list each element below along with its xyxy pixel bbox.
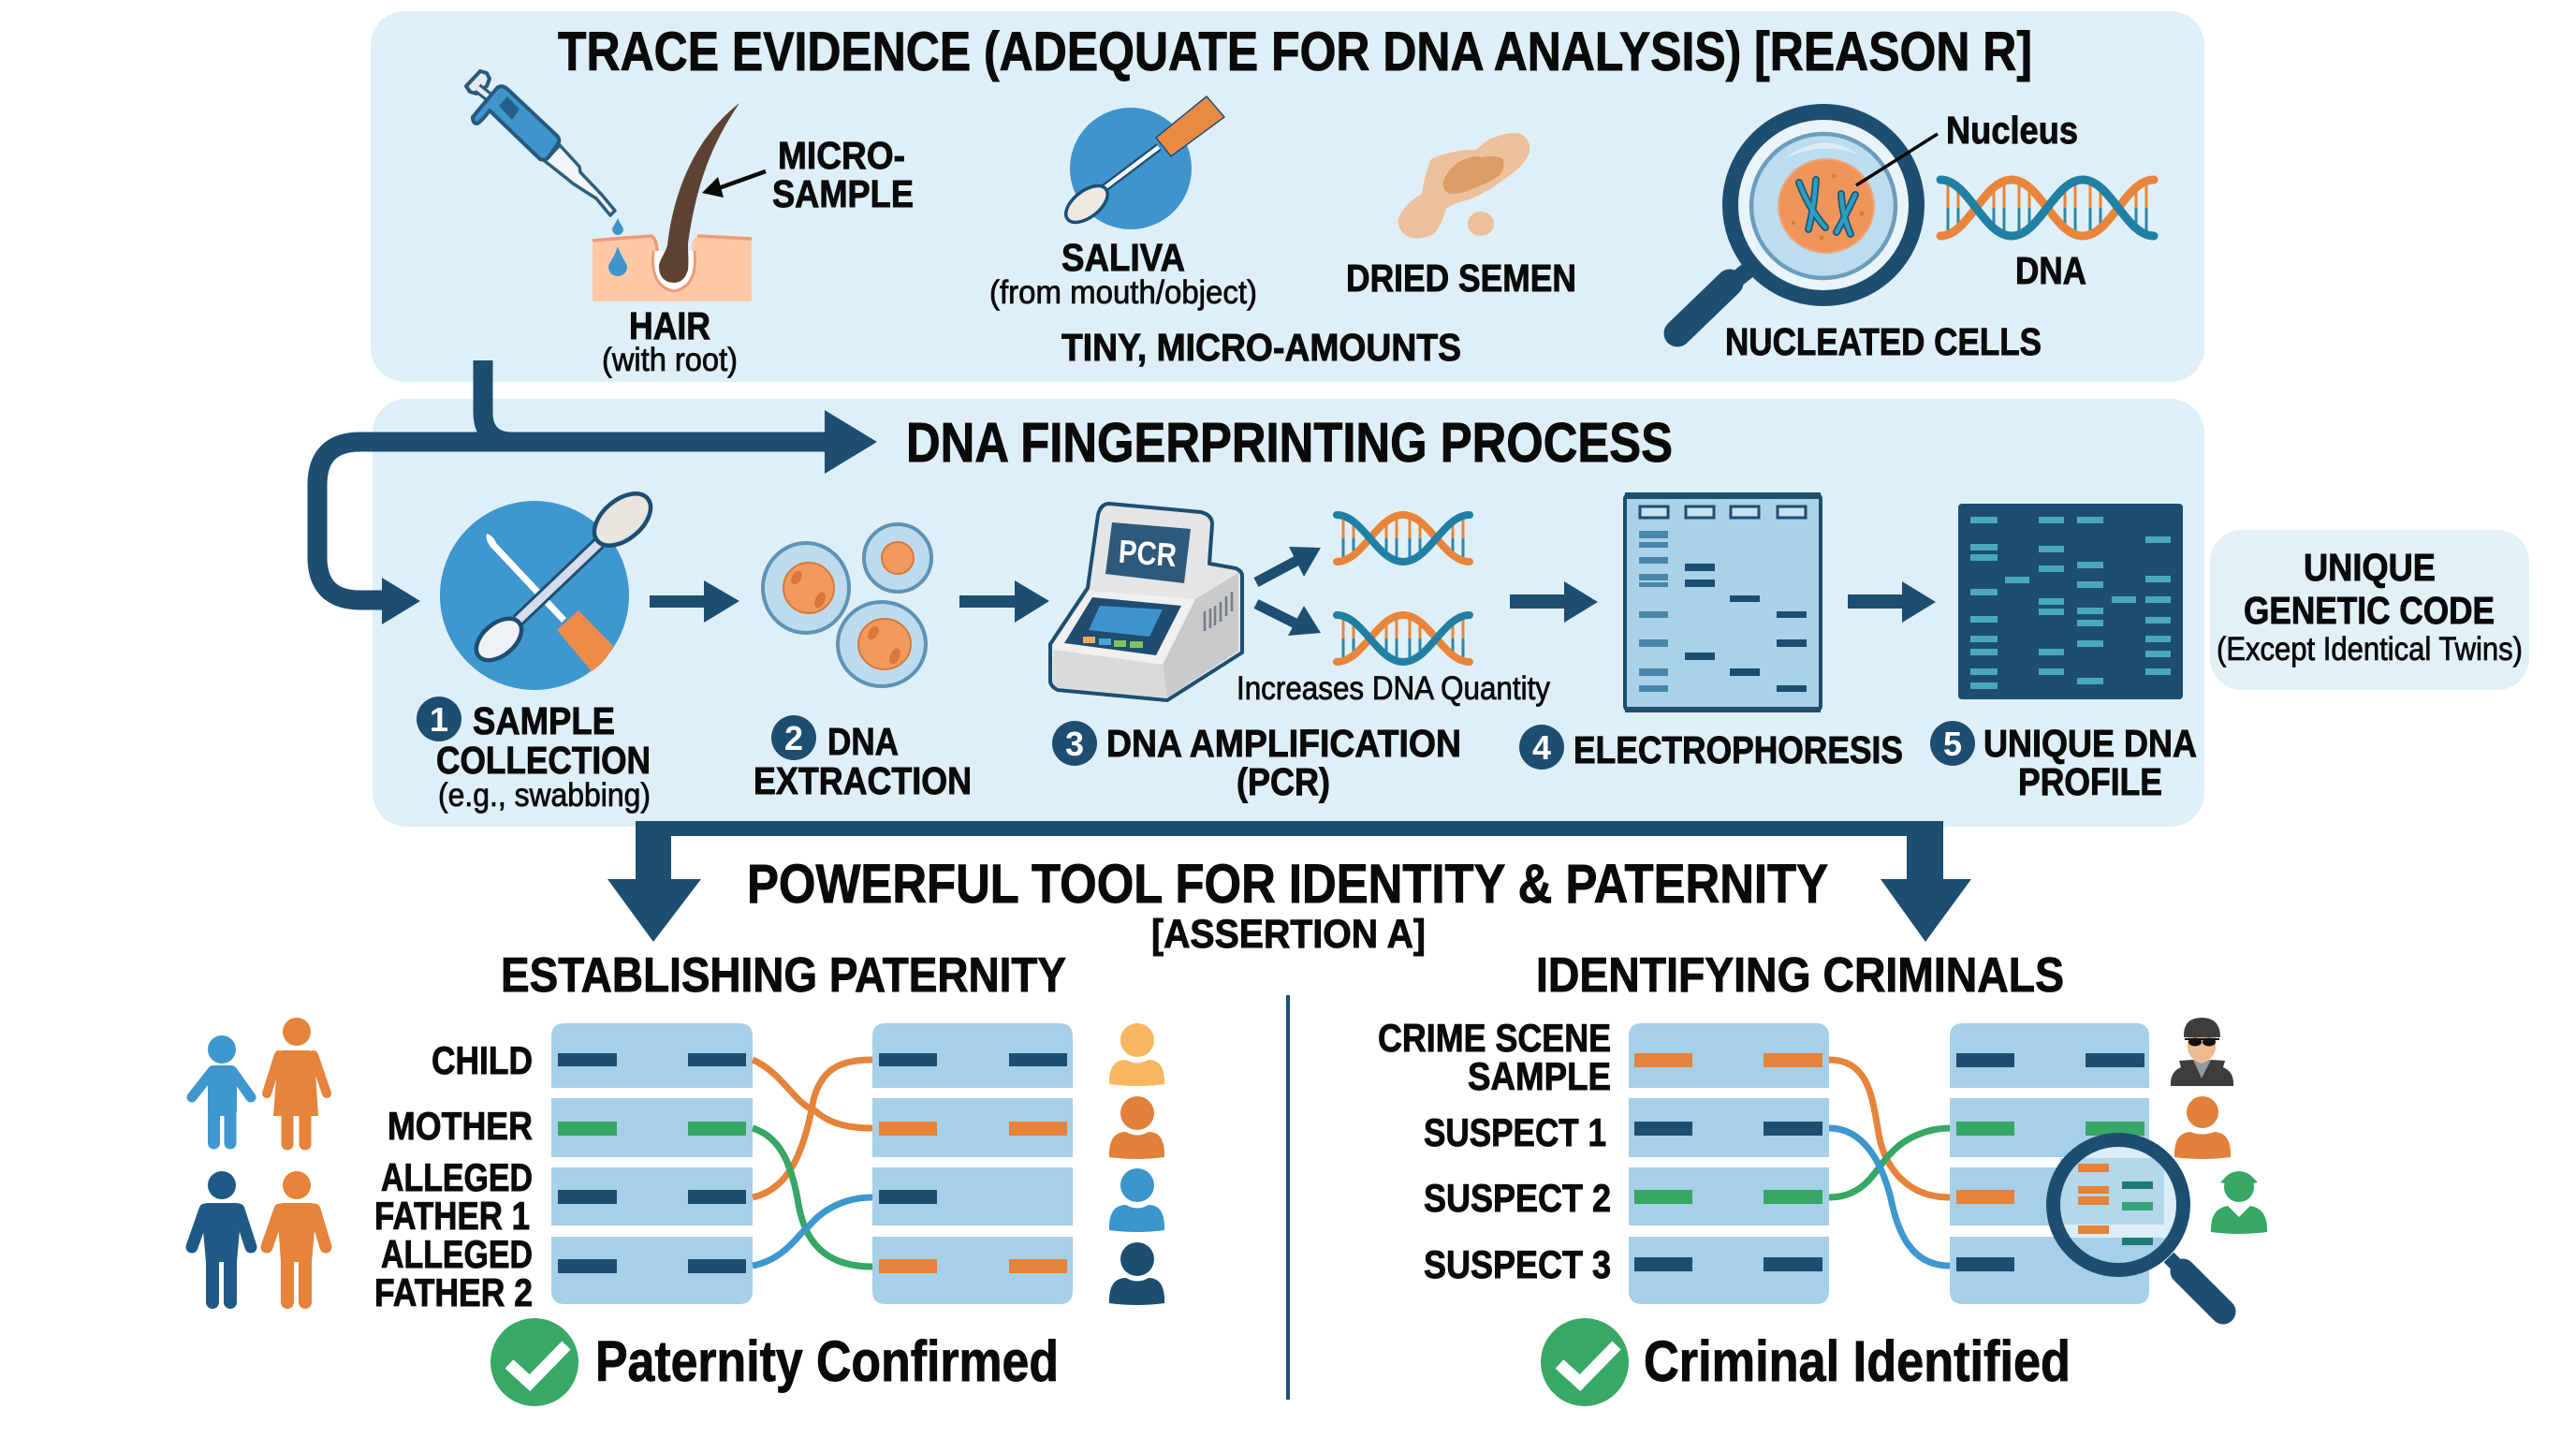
label: micro-sample <box>772 134 914 215</box>
step label 4: 4 <box>1532 728 1551 767</box>
icon: amplified DNA bottom <box>1337 615 1470 662</box>
label: hair <box>602 304 738 378</box>
result: paternity confirmed <box>490 1318 1059 1406</box>
step label 1: SAMPLE <box>473 699 615 742</box>
step label 5: UNIQUE DNA <box>1983 722 2197 765</box>
step label 3: 3 <box>1065 725 1084 763</box>
heading: process: DNA FINGERPRINTING PROCESS <box>906 412 1673 474</box>
icon: saliva swab <box>1060 96 1224 229</box>
labels: criminal rows <box>1378 1016 1611 1286</box>
label: increases DNA quantity: Increases DNA Quantity <box>1237 670 1550 707</box>
step label 3: DNA AMPLIFICATION <box>1106 722 1461 765</box>
labels: paternity rows: ALLEGED <box>381 1232 533 1276</box>
gel: samples column <box>551 1023 753 1304</box>
labels: criminal rows: SUSPECT 3 <box>1424 1242 1611 1286</box>
icon: family bottom <box>192 1171 326 1302</box>
labels: paternity rows: CHILD <box>432 1038 533 1082</box>
step label 4: ELECTROPHORESIS <box>1573 728 1903 771</box>
labels: paternity rows <box>374 1038 533 1314</box>
callout: unique genetic code: GENETIC CODE <box>2244 589 2495 632</box>
step label 1: COLLECTION <box>436 739 651 782</box>
step label 1: 1 <box>430 700 448 739</box>
gel: evidence column <box>1629 1023 1829 1304</box>
step 1 icon: sample collection swab <box>440 483 660 690</box>
arrow: step 3 to 4 <box>1510 581 1598 623</box>
arrow: micro-sample pointer <box>702 171 766 198</box>
result: criminal identified <box>1541 1318 2071 1406</box>
heading: trace evidence: TRACE EVIDENCE (ADEQUATE FOR DNA ANALYSIS) [REASON R] <box>558 22 2032 82</box>
step label 5 <box>1930 721 2197 803</box>
icon: pipette <box>466 71 623 235</box>
icon: amplified DNA top <box>1337 515 1470 562</box>
panel: establishing paternity <box>192 948 1164 1406</box>
icon: magnifier over bands <box>2054 1140 2223 1312</box>
step label 5: 5 <box>1943 725 1962 763</box>
labels: criminal rows: CRIME SCENE <box>1378 1016 1611 1060</box>
step label 2: DNA <box>827 720 899 763</box>
arrow: step 2 to 3 <box>959 580 1049 623</box>
icon: person light orange <box>1109 1023 1164 1086</box>
labels: criminal rows: SAMPLE <box>1468 1054 1611 1098</box>
labels: paternity rows: ALLEGED <box>381 1155 533 1199</box>
result: paternity confirmed: Paternity Confirmed <box>595 1329 1059 1393</box>
heading: establishing paternity: ESTABLISHING PATERNITY <box>501 948 1066 1003</box>
icon: person blue <box>1109 1168 1164 1232</box>
icon: masked criminal <box>2171 1018 2233 1086</box>
label: micro-sample: SAMPLE <box>772 172 914 215</box>
label: DNA: DNA <box>2015 249 2086 292</box>
heading: powerful tool: POWERFUL TOOL FOR IDENTITY & PATERNITY <box>747 854 1828 915</box>
icon: DNA helix <box>1940 180 2154 236</box>
connectors: suspect matches <box>1829 1060 1950 1266</box>
step 2 icon: cells <box>763 524 931 686</box>
icon: dried semen stain <box>1398 133 1530 239</box>
callout: unique genetic code <box>2210 530 2529 690</box>
arrow: step 4 to 5 <box>1848 581 1936 623</box>
step label 2: 2 <box>784 719 803 757</box>
step 3 icon: PCR machine <box>1050 504 1242 700</box>
panel: identifying criminals <box>1378 948 2267 1406</box>
gel: match column <box>1950 1023 2149 1304</box>
connectors: paternity matches <box>753 1060 872 1267</box>
label: saliva: SALIVA <box>1061 236 1185 279</box>
label: hair: (with root) <box>602 342 738 378</box>
heading: powerful tool <box>747 854 1828 957</box>
callout: unique genetic code: (Except Identical Twins) <box>2217 631 2523 668</box>
labels: paternity rows: MOTHER <box>388 1104 533 1148</box>
labels: paternity rows: FATHER 1 <box>374 1194 530 1238</box>
icon: family top <box>192 1018 327 1144</box>
divider <box>1286 995 1290 1400</box>
step label 2: EXTRACTION <box>754 759 972 802</box>
step label 2 <box>754 715 972 802</box>
label: dried semen: DRIED SEMEN <box>1346 257 1576 300</box>
icon: person navy <box>1109 1242 1164 1305</box>
label: tiny micro-amounts: TINY, MICRO-AMOUNTS <box>1061 326 1461 369</box>
label: micro-sample: MICRO- <box>778 134 905 177</box>
icon: green suspect <box>2211 1171 2267 1234</box>
step label 3: (PCR) <box>1237 760 1330 803</box>
panel: DNA fingerprinting process <box>373 399 2204 827</box>
arrow: step 1 to 2 <box>650 580 739 623</box>
step 4 icon: electrophoresis gel <box>1625 492 1821 712</box>
icon: orange suspect <box>2174 1096 2231 1159</box>
step label 1 <box>417 697 651 814</box>
labels: criminal rows: SUSPECT 2 <box>1424 1176 1611 1220</box>
label: nucleus: Nucleus <box>1946 109 2078 152</box>
icon: magnifier over nucleated cell <box>1677 112 1938 333</box>
heading: identifying criminals: IDENTIFYING CRIMINALS <box>1536 948 2064 1003</box>
step label 3 <box>1052 721 1461 803</box>
step label 5: PROFILE <box>2018 760 2162 803</box>
arrows: PCR amplification <box>1256 547 1321 636</box>
arrow: trace evidence into process <box>317 360 877 624</box>
label: PCR on machine: PCR <box>1118 534 1178 574</box>
gel: reference column <box>872 1023 1073 1304</box>
result: criminal identified: Criminal Identified <box>1644 1329 2071 1393</box>
step 5 icon: DNA profile <box>1958 504 2183 699</box>
icon: hair follicle in skin <box>593 103 752 301</box>
step label 1: (e.g., swabbing) <box>438 777 651 814</box>
labels: paternity rows: FATHER 2 <box>374 1270 533 1314</box>
label: nucleated cells: NUCLEATED CELLS <box>1725 320 2042 363</box>
subheading: assertion A: [ASSERTION A] <box>1151 912 1426 957</box>
label: saliva: (from mouth/object) <box>989 274 1257 311</box>
icon: person orange <box>1109 1096 1164 1159</box>
callout: unique genetic code: UNIQUE <box>2304 546 2436 589</box>
label: saliva <box>989 236 1257 311</box>
panel: trace evidence <box>371 11 2204 382</box>
labels: criminal rows: SUSPECT 1 <box>1424 1110 1606 1154</box>
label: hair: HAIR <box>629 304 710 347</box>
arrow: process splitting to two applications <box>607 821 1971 942</box>
